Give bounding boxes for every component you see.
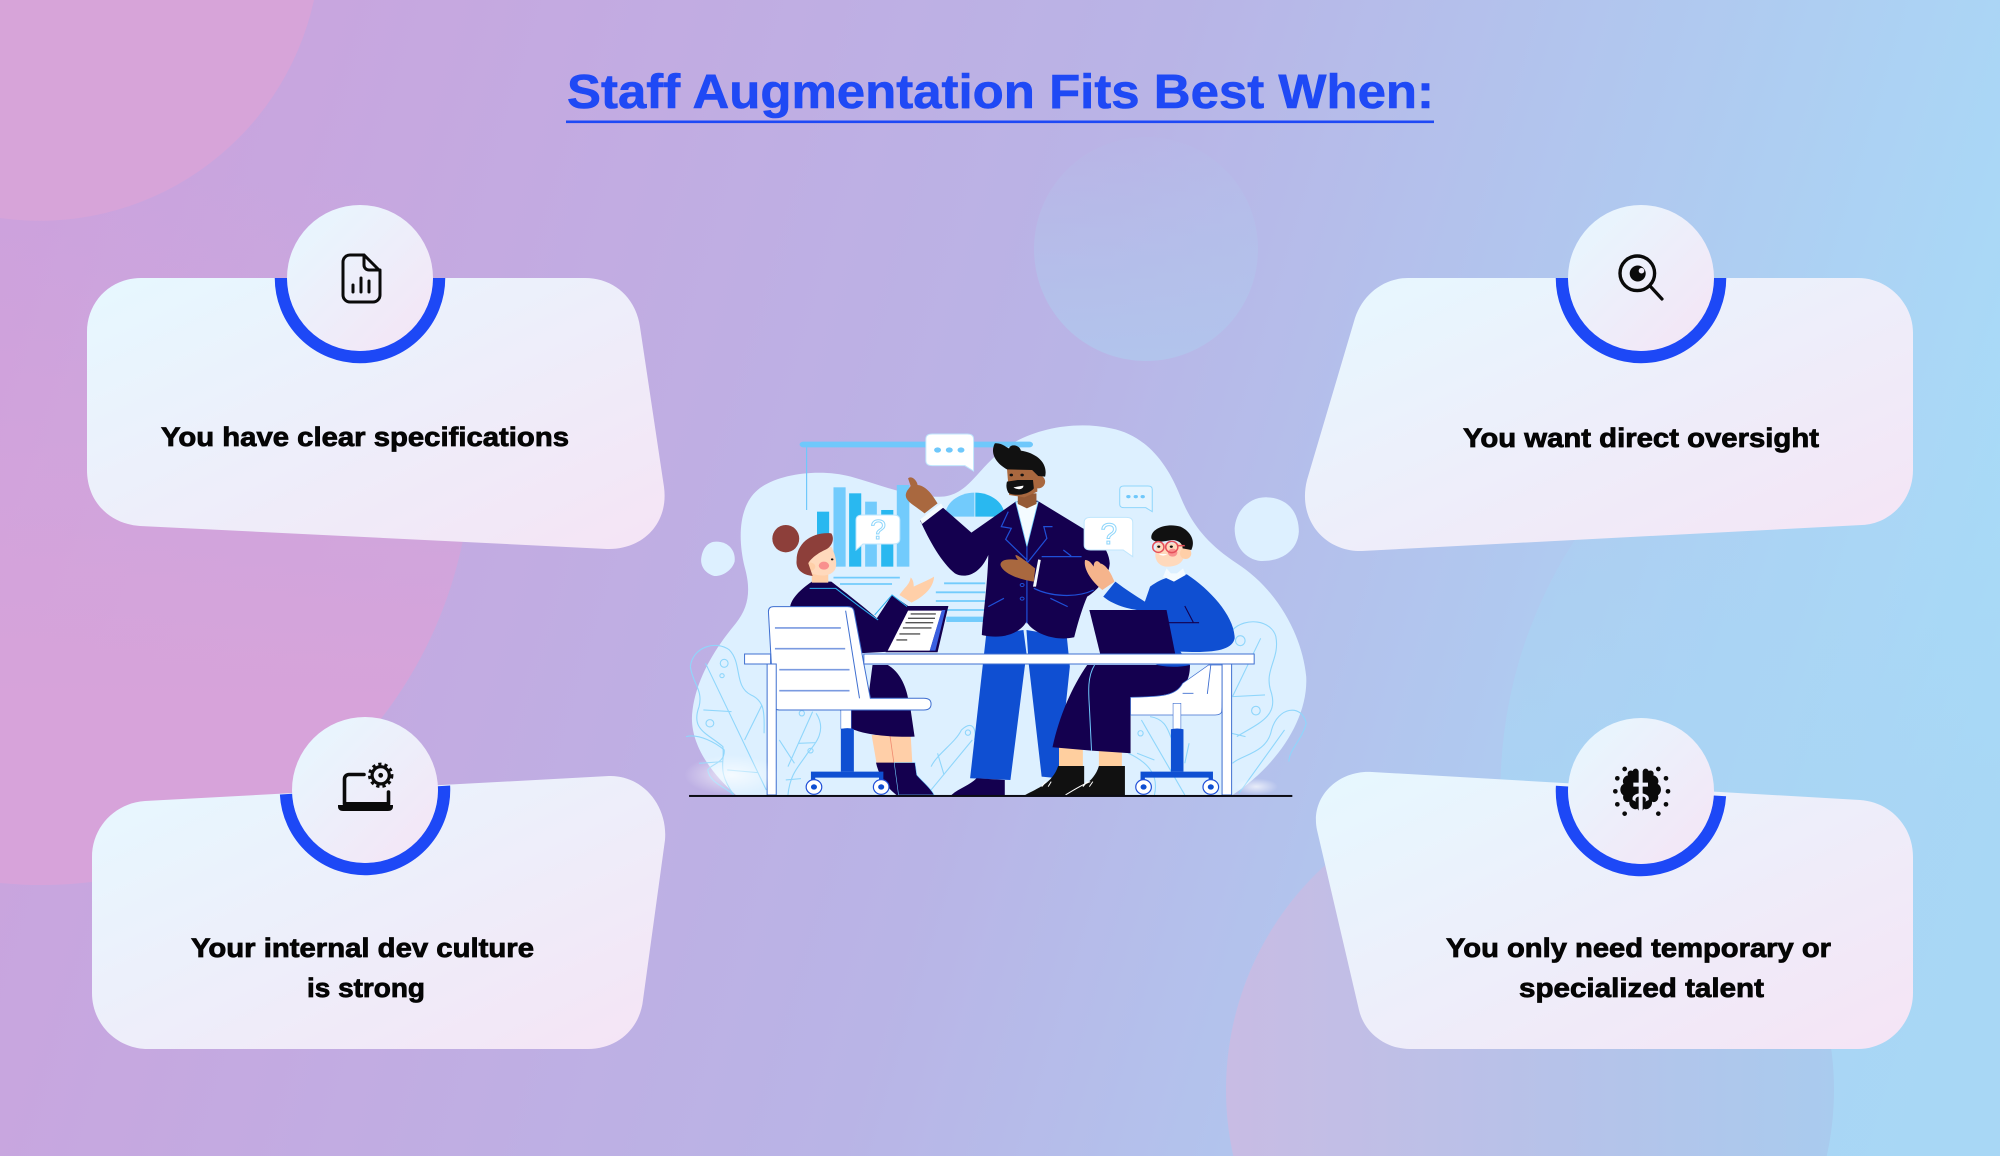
shirt: [1016, 502, 1038, 547]
text: temporary talent: You only need temporary or: [1446, 933, 1832, 963]
collar: [1163, 568, 1186, 582]
speech bubble: top dots: [926, 434, 974, 471]
hand: [899, 577, 934, 603]
panel: internal dev culture: [92, 717, 665, 1049]
floor line: [689, 795, 1292, 797]
hair: [993, 443, 1046, 477]
text: internal dev culture: is strong: [307, 973, 425, 1003]
text: internal dev culture: Your internal dev culture: [191, 933, 534, 963]
pointing hand: [906, 477, 938, 513]
panel: clear specifications: [87, 205, 665, 549]
text: temporary talent: specialized talent: [1519, 973, 1764, 1003]
hair: [1151, 525, 1193, 550]
icon: brain: [1613, 767, 1670, 816]
skirt: [840, 665, 915, 737]
hand: [1085, 560, 1115, 590]
icon: document chart: [343, 255, 380, 302]
text: temporary talent: [1446, 933, 1832, 1003]
table: [745, 654, 1254, 795]
legs: [1059, 745, 1122, 767]
panel: temporary talent: [1316, 718, 1913, 1049]
laptop: [1089, 610, 1175, 654]
seated woman: [772, 525, 948, 795]
text: clear specifications: You have clear specifications: [161, 422, 569, 452]
glow: floor corners: [684, 755, 1278, 795]
glasses: [1153, 541, 1185, 553]
chair: left: [768, 607, 931, 794]
blazer lines: [988, 512, 1094, 623]
trousers: [970, 630, 1070, 780]
title: Staff Augmentation Fits Best When:: [567, 66, 1434, 119]
icon: magnifier eye: [1620, 256, 1662, 299]
speech bubble: question left: ?: [870, 514, 886, 545]
text: direct oversight: You want direct oversight: [1463, 423, 1819, 453]
standing man: [906, 443, 1110, 795]
sweater: [1103, 574, 1235, 667]
seated man: [1025, 525, 1235, 795]
legs: [872, 735, 912, 765]
speech bubble: question right: [1084, 517, 1133, 557]
blob backdrop: [692, 425, 1306, 795]
blazer: [920, 501, 1110, 638]
speech bubble: question left: [856, 514, 900, 550]
text: internal dev culture: [191, 933, 534, 1003]
speech bubble: question right: ?: [1101, 518, 1117, 551]
plants: [686, 622, 1306, 795]
tablet: [886, 606, 948, 652]
panel: direct oversight: [1305, 205, 1913, 551]
shoes: [1025, 766, 1125, 795]
cuff: [920, 503, 944, 524]
chest hand: [1000, 555, 1035, 582]
boots: [876, 763, 901, 795]
speech bubble: small dots: [1120, 486, 1152, 512]
head: [812, 570, 828, 583]
neck and head: [1018, 493, 1036, 508]
torso: [790, 582, 912, 653]
icon: laptop gear: [338, 764, 393, 811]
illustration: team meeting: [684, 425, 1306, 797]
hair: [772, 525, 799, 552]
shoe: [951, 778, 1005, 795]
head: [1155, 543, 1184, 567]
folder edge: [1033, 559, 1041, 587]
chair: right: [1131, 665, 1224, 794]
chart board: [800, 442, 1033, 622]
